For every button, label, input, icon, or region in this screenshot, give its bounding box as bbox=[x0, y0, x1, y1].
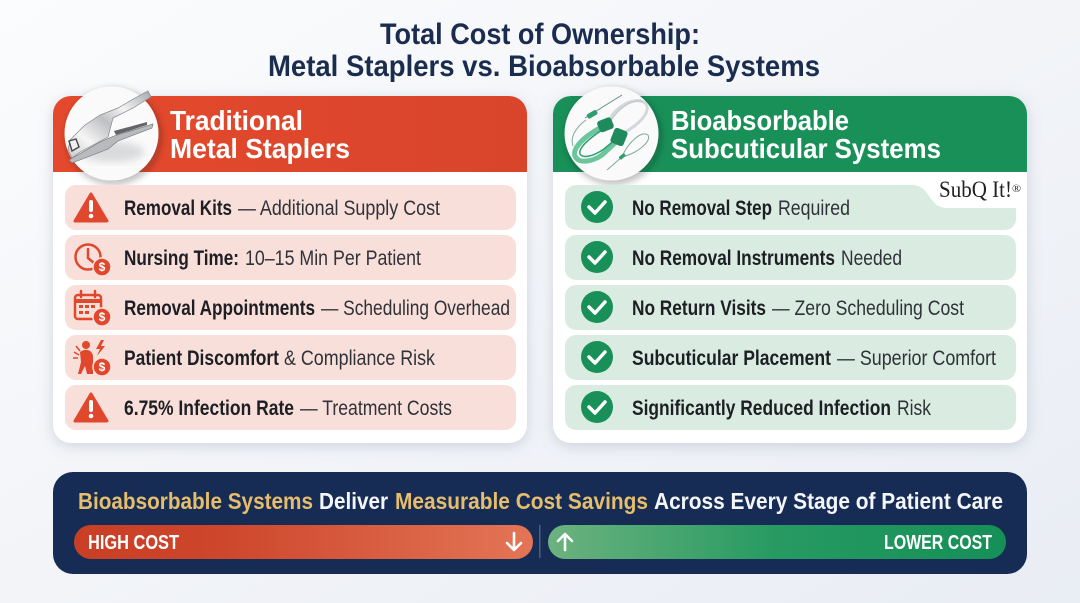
row: no removal instruments: Needed bbox=[841, 247, 902, 270]
row: nursing time: Nursing Time: bbox=[124, 247, 239, 270]
header band: bioabsorbable bbox=[553, 96, 1027, 172]
row: no removal step: Required bbox=[778, 197, 850, 220]
row: no removal instruments: No Removal Instruments bbox=[632, 247, 835, 270]
heading: bioabsorbable subcuticular systems: Bioabsorbable bbox=[671, 105, 849, 136]
row: subcuticular placement bbox=[565, 335, 1016, 380]
row: nursing time bbox=[65, 235, 516, 280]
heading: bioabsorbable subcuticular systems bbox=[671, 105, 941, 164]
title: Total Cost of Ownership: bbox=[380, 18, 700, 51]
bar: high cost: HIGH COST bbox=[88, 532, 179, 554]
row: removal kits bbox=[65, 185, 516, 230]
banner: cost savings summary bbox=[53, 472, 1027, 574]
icon: check bbox=[581, 391, 613, 423]
heading: traditional metal staplers bbox=[170, 105, 350, 164]
header band: traditional bbox=[53, 96, 527, 172]
row: no return visits: — Zero Scheduling Cost bbox=[772, 297, 964, 320]
row: no return visits bbox=[565, 285, 1016, 330]
row: infection rate: — Treatment Costs bbox=[300, 397, 452, 420]
arrow: down bbox=[507, 533, 521, 550]
banner headline: Across Every Stage of Patient Care bbox=[654, 488, 1003, 514]
row: reduced infection risk bbox=[565, 385, 1016, 430]
row: removal appointments bbox=[65, 285, 516, 330]
title bbox=[268, 18, 820, 83]
row: nursing time: 10–15 Min Per Patient bbox=[245, 247, 421, 270]
banner headline: Deliver bbox=[319, 488, 388, 514]
icon: suture device photo bbox=[564, 86, 658, 180]
row: no removal step: No Removal Step bbox=[632, 197, 772, 220]
row: no removal step bbox=[565, 185, 1016, 230]
icon: warning triangle bbox=[75, 194, 107, 221]
icon: calendar with dollar bbox=[75, 291, 111, 326]
heading: traditional metal staplers: Traditional bbox=[170, 105, 303, 136]
icon: clock with dollar: $ bbox=[99, 260, 106, 274]
logo: SubQ It!: SubQ It! bbox=[939, 177, 1012, 202]
icon: metal stapler photo bbox=[64, 86, 158, 180]
panel: bioabsorbable subcuticular systems bbox=[553, 86, 1027, 443]
row: removal appointments: Removal Appointments bbox=[124, 297, 315, 320]
row: no return visits: No Return Visits bbox=[632, 297, 766, 320]
icon: calendar with dollar: $ bbox=[99, 310, 106, 324]
logo: SubQ It!: ® bbox=[1012, 183, 1021, 195]
row: infection rate: 6.75% Infection Rate bbox=[124, 397, 294, 420]
row: removal kits: Removal Kits bbox=[124, 197, 232, 220]
row: infection rate bbox=[65, 385, 516, 430]
bar: high cost bbox=[74, 525, 533, 559]
row: subcuticular placement: — Superior Comfort bbox=[837, 347, 996, 370]
bar: lower cost bbox=[548, 525, 1006, 559]
logo: SubQ It! bbox=[912, 177, 1027, 208]
row: patient discomfort: Patient Discomfort bbox=[124, 347, 279, 370]
icon: check bbox=[581, 341, 613, 373]
icon: patient pain with dollar: $ bbox=[99, 360, 106, 374]
row: reduced infection risk: Significantly Reduced Infection bbox=[632, 397, 891, 420]
icon: check bbox=[581, 291, 613, 323]
row: removal appointments: — Scheduling Overhead bbox=[321, 297, 510, 320]
arrow: up bbox=[558, 534, 572, 550]
icon: warning triangle bbox=[75, 394, 107, 421]
bar: lower cost: LOWER COST bbox=[884, 532, 992, 554]
heading: bioabsorbable subcuticular systems: Subcuticular Systems bbox=[671, 133, 941, 164]
row: removal kits: — Additional Supply Cost bbox=[238, 197, 440, 220]
row: no removal instruments bbox=[565, 235, 1016, 280]
banner headline: Bioabsorbable Systems bbox=[78, 488, 313, 514]
row: reduced infection risk: Risk bbox=[897, 397, 931, 420]
banner headline bbox=[78, 488, 1003, 514]
title: Metal Staplers vs. Bioabsorbable Systems bbox=[268, 50, 820, 83]
row: patient discomfort bbox=[65, 335, 516, 380]
icon: check bbox=[581, 191, 613, 223]
heading: traditional metal staplers: Metal Staplers bbox=[170, 133, 350, 164]
row: subcuticular placement: Subcuticular Placement bbox=[632, 347, 831, 370]
panel: traditional metal staplers bbox=[53, 86, 527, 443]
row: patient discomfort: & Compliance Risk bbox=[284, 347, 435, 370]
icon: check bbox=[581, 241, 613, 273]
banner headline: Measurable Cost Savings bbox=[395, 488, 648, 514]
icon: clock with dollar bbox=[76, 244, 111, 276]
icon: patient pain with dollar bbox=[73, 340, 111, 376]
